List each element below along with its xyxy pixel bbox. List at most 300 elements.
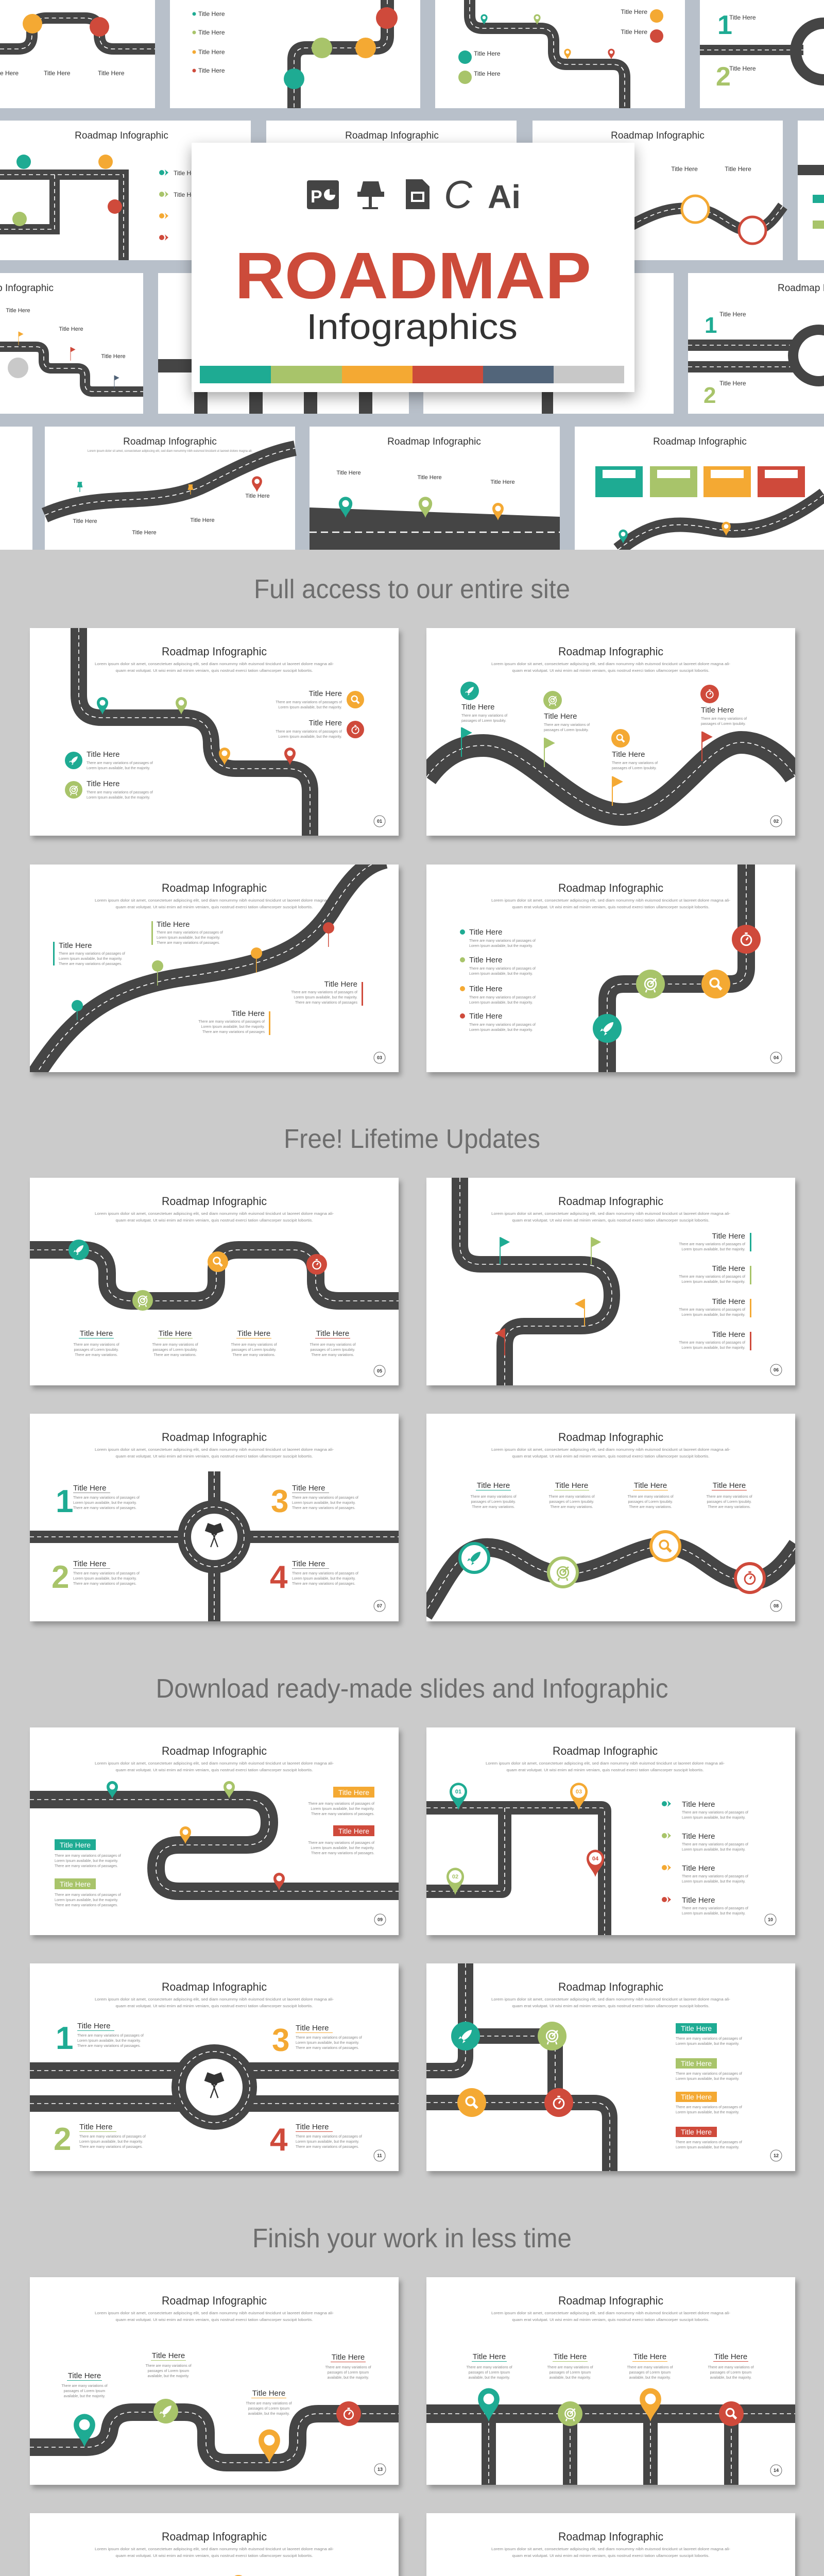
slide 14: Roadmap Infographic [558,2294,663,2307]
slide 10: Lorem Ipsum available, but the majority. [682,1912,746,1916]
slide 08: There are many variations. [472,1505,515,1509]
section title 1: Full access to our entire site [254,574,570,604]
slide 01: Roadmap Infographic [162,645,267,658]
slide 04: Lorem Ipsum available, but the majority. [469,1001,533,1005]
slide 02 [426,628,795,836]
slide 16: quam erat volutpat. Ut wisi enim ad minim veniam, quis nostrud exerci tation ullamcorper suscipit lobortis. [512,2553,710,2558]
slide 08: Title Here [634,1481,667,1490]
slide 08: There are many variations of [627,1495,674,1499]
slide 13: Lorem ipsum dolor sit amet, consectetuer adipiscing elit, sed diam nonummy nibh euismod tincidunt ut laoreet dolore magna ali- [95,2311,334,2315]
slide 02: Title Here [544,712,577,721]
slide 16: Lorem ipsum dolor sit amet, consectetuer adipiscing elit, sed diam nonummy nibh euismod tincidunt ut laoreet dolore magna ali- [491,2547,731,2551]
slide 01: Lorem Ipsum available, but the majority. [87,796,150,800]
collage row D: Title Here [132,530,157,536]
slide 12: Lorem Ipsum available, but the majority. [676,2042,740,2046]
slide 09: Title Here [338,1827,369,1835]
slide 04: There are many variations of passages of [469,996,536,999]
collage row A: e Here [0,70,19,77]
slide 12: Lorem Ipsum available, but the majority. [676,2077,740,2081]
slide 05: There are many variations. [75,1353,118,1357]
slide 07: Title Here [73,1560,106,1568]
slide 15: Roadmap Infographic [162,2530,267,2543]
slide 14: available, but the majority. [710,2376,751,2380]
slide 03: There are many variations of passages [295,1001,357,1005]
slide 11: Lorem ipsum dolor sit amet, consectetuer adipiscing elit, sed diam nonummy nibh euismod tincidunt ut laoreet dolore magna ali- [95,1997,334,2002]
slide 13: There are many variations of [61,2384,108,2388]
slide 05: passages of Lorem Ipsubity. [310,1348,355,1352]
slide 05: quam erat volutpat. Ut wisi enim ad minim veniam, quis nostrud exerci tation ullamcorper suscipit lobortis. [115,1218,313,1223]
slide 02: 02 [774,819,779,824]
collage row B: Title He [174,170,195,177]
slide 08: 08 [774,1603,779,1608]
slide 02: Title Here [612,750,645,759]
slide 06: Lorem Ipsum available, but the majority. [681,1346,745,1350]
slide 10: Lorem ipsum dolor sit amet, consectetuer adipiscing elit, sed diam nonummy nibh euismod tincidunt ut laoreet dolore magna ali- [486,1761,725,1766]
slide 12: Lorem Ipsum available, but the majority. [676,2146,740,2149]
slide 13: passages of Lorem Ipsum [148,2369,189,2373]
center title card [192,143,634,392]
slide 11: There are many variations of passages. [79,2145,143,2149]
slide 11: 1 [56,2021,73,2056]
slide 04: Title Here [469,1012,502,1021]
slide 12: There are many variations of passages of [676,2037,742,2041]
slide 02: Roadmap Infographic [558,645,663,658]
collage row C: Title Here [719,311,746,318]
icon: illustrator: Ai [488,178,521,215]
slide 14: available, but the majority. [469,2376,510,2380]
slide 04: quam erat volutpat. Ut wisi enim ad minim veniam, quis nostrud exerci tation ullamcorper suscipit lobortis. [512,905,710,909]
slide 09: quam erat volutpat. Ut wisi enim ad minim veniam, quis nostrud exerci tation ullamcorper suscipit lobortis. [115,1768,313,1772]
slide 04 [426,865,795,1072]
collage row A: 2 [716,62,731,92]
slide 10: Title Here [682,1832,715,1841]
slide 05: 05 [377,1368,382,1374]
slide 09: Lorem Ipsum available, but the majority. [311,1807,374,1811]
collage row D [0,427,824,550]
slide 11: Title Here [79,2123,112,2131]
slide 09: There are many variations of passages of [55,1854,121,1858]
slide 06: Title Here [712,1330,745,1339]
slide 12: Title Here [681,2093,712,2101]
collage row D: Roadmap Infographic [387,436,481,447]
slide 09: Title Here [60,1841,91,1849]
slide 13: There are many variations of [145,2364,192,2368]
slide 09: Title Here [338,1788,369,1797]
slide 03: Lorem Ipsum available, but the majority. [201,1025,265,1029]
slide 14: passages of Lorem Ipsum [469,2371,510,2375]
slide 11: 4 [270,2122,288,2158]
slide 11: quam erat volutpat. Ut wisi enim ad minim veniam, quis nostrud exerci tation ullamcorper suscipit lobortis. [115,2004,313,2008]
collage row C: Title Here [101,353,126,360]
slide 02: quam erat volutpat. Ut wisi enim ad minim veniam, quis nostrud exerci tation ullamcorper suscipit lobortis. [512,668,710,673]
slide 10: 03 [576,1789,582,1795]
slide 11: 2 [54,2122,71,2157]
slide 11: Title Here [77,2022,110,2030]
slide 03: Lorem Ipsum available, but the majority. [294,996,357,999]
slide 01: There are many variations of passages of [276,701,342,704]
slide 13: passages of Lorem Ipsum [64,2389,105,2393]
slide 05: passages of Lorem Ipsubity. [74,1348,119,1352]
slide 13: Title Here [252,2389,285,2398]
slide 09: Title Here [60,1880,91,1888]
slide 14: Title Here [554,2352,587,2361]
subtitle: Infographics: Infographics [306,307,518,347]
slide 08: There are many variations. [550,1505,593,1509]
slide 11: Lorem Ipsum available, but the majority. [296,2041,359,2045]
slide 05: There are many variations of [231,1343,277,1347]
slide 10: 10 [768,1917,773,1922]
slide 11: There are many variations of passages. [77,2044,141,2048]
slide 01: Lorem Ipsum available, but the majority. [278,735,342,739]
collage row B: Title Here [671,165,698,173]
slide 07: Lorem ipsum dolor sit amet, consectetuer adipiscing elit, sed diam nonummy nibh euismod tincidunt ut laoreet dolore magna ali- [95,1447,334,1452]
slide 06: Title Here [712,1297,745,1306]
slide 03: There are many variations of passages. [59,962,122,966]
slide 06: Lorem Ipsum available, but the majority. [681,1248,745,1251]
slide 03: 03 [377,1055,382,1060]
slide 03: There are many variations of passages of [59,952,125,956]
collage row D: Lorem ipsum dolor sit amet, consectetuer adipiscing elit, sed diam nonummy nibh euismod tincidunt ut laoreet dolore magna ali- [88,450,252,453]
slide 08: There are many variations of [470,1495,517,1499]
slide 06: 06 [774,1367,779,1372]
slide 01: There are many variations of passages of [87,791,153,794]
collage row D: Title Here [417,474,442,481]
slide 07 [30,1414,399,1621]
slide 02: passages of Lorem Ipsubity. [544,728,589,732]
slide 03: Lorem ipsum dolor sit amet, consectetuer adipiscing elit, sed diam nonummy nibh euismod tincidunt ut laoreet dolore magna ali- [95,898,334,903]
slide 14: There are many variations of [627,2366,673,2369]
collage row D: Title Here [336,470,361,476]
slide 14: available, but the majority. [629,2376,671,2380]
slide 10: Title Here [682,1896,715,1905]
collage row C: 2 [703,383,716,408]
slide 09: There are many variations of passages. [55,1904,118,1907]
slide 13: Title Here [68,2371,101,2380]
slide 12: 12 [774,2153,779,2158]
slide 03: There are many variations of passages [202,1030,265,1034]
slide 09: There are many variations of passages of [55,1893,121,1897]
slide 09: There are many variations of passages. [311,1812,374,1816]
slide 12: There are many variations of passages of [676,2106,742,2109]
slide 03: Title Here [324,980,357,989]
slide 07: Lorem Ipsum available, but the majority. [73,1501,137,1505]
slide 05: There are many variations. [153,1353,197,1357]
slide 01: There are many variations of passages of [276,730,342,734]
collage row D: Title Here [73,518,97,524]
slide 08: Title Here [477,1481,510,1490]
slide 04: There are many variations of passages of [469,939,536,943]
slide 02: There are many variations of [461,714,507,718]
slide 12: quam erat volutpat. Ut wisi enim ad minim veniam, quis nostrud exerci tation ullamcorper suscipit lobortis. [512,2004,710,2008]
collage row A: Title Here [729,65,756,72]
slide 13: available, but the majority. [148,2375,189,2378]
slide 07: 2 [52,1560,69,1595]
slide 15: Lorem ipsum dolor sit amet, consectetuer adipiscing elit, sed diam nonummy nibh euismod tincidunt ut laoreet dolore magna ali- [95,2547,334,2551]
slide 05: passages of Lorem Ipsubity. [152,1348,198,1352]
slide 08: Roadmap Infographic [558,1431,663,1444]
collage row D: Title Here [190,517,215,523]
slide 12: Title Here [681,2024,712,2032]
collage row C [0,273,824,414]
slide 14: Title Here [714,2352,747,2361]
slide 14: There are many variations of [708,2366,754,2369]
slide 11: 3 [272,2023,289,2058]
slide 11: Title Here [296,2024,329,2032]
slide 07: Title Here [292,1560,325,1568]
slide 07: Lorem Ipsum available, but the majority. [292,1501,356,1505]
slide 02: There are many variations of [701,717,747,721]
collage row A: Title Here [474,50,501,57]
slide 03: Lorem Ipsum available, but the majority. [157,936,220,940]
slide 01: Lorem Ipsum available, but the majority. [278,706,342,709]
collage row A: Title Here [198,10,225,18]
slide 03: Title Here [59,941,92,950]
slide 03: Title Here [232,1009,265,1018]
slide 09 [30,1727,399,1935]
slide 07: There are many variations of passages. [73,1582,136,1586]
slide 10: There are many variations of passages of [682,1843,748,1846]
slide 03: There are many variations of passages of [291,991,357,994]
slide 12: Lorem ipsum dolor sit amet, consectetuer adipiscing elit, sed diam nonummy nibh euismod tincidunt ut laoreet dolore magna ali- [491,1997,731,2002]
slide 09: Roadmap Infographic [162,1744,267,1757]
slide 05: There are many variations of [73,1343,119,1347]
collage row A [0,0,824,108]
collage row B: Title Here [725,165,751,173]
slide 14: passages of Lorem Ipsum [710,2371,751,2375]
collage row C: Title Here [6,308,30,314]
slide 05: There are many variations. [232,1353,276,1357]
slide 02: Title Here [461,703,494,711]
slide 04: Lorem Ipsum available, but the majority. [469,1028,533,1032]
slide 08: Title Here [555,1481,588,1490]
slide 03: There are many variations of passages. [157,941,220,945]
slide 10: 04 [592,1856,599,1862]
slide 08: There are many variations. [629,1505,672,1509]
collage row A: Title Here [621,8,647,15]
collage row C: Title Here [59,326,83,332]
slide 03: Roadmap Infographic [162,882,267,894]
icon: keynote [357,181,384,209]
slide 06: Title Here [712,1264,745,1273]
icon: canva: C [444,173,473,217]
slide 01: quam erat volutpat. Ut wisi enim ad minim veniam, quis nostrud exerci tation ullamcorper suscipit lobortis. [115,668,313,673]
slide 07: 3 [271,1484,288,1519]
collage row A: Title Here [729,14,756,21]
slide 07: There are many variations of passages of [73,1496,140,1500]
slide 07: There are many variations of passages of [292,1572,358,1575]
collage row D: Roadmap Infographic [123,436,217,447]
header collage [0,0,824,550]
collage row B: Roadmap Infographic [611,130,705,141]
slide 03: There are many variations of passages of [198,1020,265,1024]
slide 05: Title Here [316,1329,349,1338]
slide 02: passages of Lorem Ipsubity. [612,767,657,770]
slide 07: There are many variations of passages. [73,1506,136,1510]
slide 11: Lorem Ipsum available, but the majority. [79,2140,143,2144]
slide 06: There are many variations of passages of [679,1275,745,1279]
slide 14: 14 [774,2468,779,2473]
slide 11: There are many variations of passages of [77,2034,144,2038]
slide 01: Title Here [309,689,342,698]
slide 11: Lorem Ipsum available, but the majority. [77,2039,141,2043]
slide 09: There are many variations of passages. [55,1865,118,1868]
slide 10: Title Here [682,1864,715,1873]
slide 03: There are many variations of passages of [157,931,223,935]
slide 02: There are many variations of [544,723,590,727]
slide 06: Lorem Ipsum available, but the majority. [681,1313,745,1317]
slide 10: Lorem Ipsum available, but the majority. [682,1880,746,1884]
slide 11: There are many variations of passages of [296,2135,362,2139]
slide 05: Lorem ipsum dolor sit amet, consectetuer adipiscing elit, sed diam nonummy nibh euismod tincidunt ut laoreet dolore magna ali- [95,1211,334,1216]
slide 14: There are many variations of [466,2366,512,2369]
slide 10: 01 [455,1789,461,1795]
slide 05: Title Here [237,1329,270,1338]
slide 11: There are many variations of passages. [296,2145,359,2149]
slide 12: Lorem Ipsum available, but the majority. [676,2111,740,2114]
slide 04: 04 [774,1055,779,1060]
slide 09: Lorem Ipsum available, but the majority. [311,1846,374,1850]
collage row B: Roadmap Infographic [345,130,439,141]
slide 07: There are many variations of passages of [73,1572,140,1575]
slide 14: Title Here [633,2352,666,2361]
slide 08: passages of Lorem Ipsubity. [707,1500,752,1504]
slide 11: There are many variations of passages of [296,2036,362,2040]
collage row C: 1 [705,313,717,338]
slide 08: Title Here [713,1481,746,1490]
slide 13: available, but the majority. [328,2376,369,2380]
slide 12: Title Here [681,2128,712,2136]
slide 09: Lorem ipsum dolor sit amet, consectetuer adipiscing elit, sed diam nonummy nibh euismod tincidunt ut laoreet dolore magna ali- [95,1761,334,1766]
slide 04: Lorem Ipsum available, but the majority. [469,944,533,948]
slide 13: There are many variations of [325,2366,371,2369]
slide 11: Lorem Ipsum available, but the majority. [296,2140,359,2144]
slide 10: 02 [452,1874,458,1880]
slide 04: Title Here [469,928,502,937]
slide 07: There are many variations of passages. [292,1506,355,1510]
collage row A: Title Here [621,28,647,36]
slide 13: quam erat volutpat. Ut wisi enim ad minim veniam, quis nostrud exerci tation ullamcorper suscipit lobortis. [115,2317,313,2322]
slide 01: There are many variations of passages of [87,761,153,765]
slide 14: quam erat volutpat. Ut wisi enim ad minim veniam, quis nostrud exerci tation ullamcorper suscipit lobortis. [512,2317,710,2322]
slide 11: Roadmap Infographic [162,1980,267,1993]
slide 03: Title Here [157,920,190,929]
slide 13: available, but the majority. [248,2412,289,2416]
slide 02: passages of Lorem Ipsubity. [461,719,506,723]
slide 13: Title Here [152,2351,185,2360]
color bar [200,366,624,383]
title: ROADMAP: ROADMAP [235,239,591,313]
slide 10: There are many variations of passages of [682,1811,748,1815]
slide 10 [426,1727,795,1935]
slide 05: Roadmap Infographic [162,1195,267,1208]
section title 4: Finish your work in less time [252,2224,572,2253]
slide 11: There are many variations of passages of [79,2135,146,2139]
collage row C: Title Here [719,380,746,387]
collage row B: Title He [174,191,195,198]
slide 12 [426,1963,795,2171]
slide 15 [30,2513,399,2576]
slide 09: There are many variations of passages of [308,1841,374,1845]
slide 03: quam erat volutpat. Ut wisi enim ad minim veniam, quis nostrud exerci tation ullamcorper suscipit lobortis. [115,905,313,909]
slide 01: Title Here [309,719,342,727]
slide 06: There are many variations of passages of [679,1308,745,1312]
slide 13: Title Here [332,2353,365,2362]
slide 05: There are many variations of [152,1343,198,1347]
slide 05: passages of Lorem Ipsubity. [231,1348,277,1352]
slide 13: passages of Lorem Ipsum [328,2371,369,2375]
slide 11: There are many variations of passages. [296,2046,359,2050]
slide 16 [426,2513,795,2576]
slide 10: Lorem Ipsum available, but the majority. [682,1848,746,1852]
collage row A: Title Here [198,48,225,56]
slide 04: There are many variations of passages of [469,967,536,971]
slide 15: quam erat volutpat. Ut wisi enim ad minim veniam, quis nostrud exerci tation ullamcorper suscipit lobortis. [115,2553,313,2558]
slide 16: Roadmap Infographic [558,2530,663,2543]
collage row A: Title Here [44,70,71,77]
slide 06: Roadmap Infographic [558,1195,663,1208]
slide 13: available, but the majority. [64,2395,105,2398]
slide 07: There are many variations of passages. [292,1582,355,1586]
slide 04: Lorem Ipsum available, but the majority. [469,972,533,976]
slide 02: Lorem ipsum dolor sit amet, consectetuer adipiscing elit, sed diam nonummy nibh euismod tincidunt ut laoreet dolore magna ali- [491,662,731,666]
slide 11: 11 [377,2153,382,2158]
slide 14: There are many variations of [547,2366,593,2369]
slide 04: Lorem ipsum dolor sit amet, consectetuer adipiscing elit, sed diam nonummy nibh euismod tincidunt ut laoreet dolore magna ali- [491,898,731,903]
slide 05: There are many variations. [311,1353,354,1357]
slide 01: Lorem Ipsum available, but the majority. [87,767,150,770]
slide 05: There are many variations of [310,1343,356,1347]
slide 06: Title Here [712,1232,745,1241]
slide 13 [30,2277,399,2485]
slide 08: There are many variations of [706,1495,752,1499]
collage row A: Title Here [198,29,225,36]
slide 04: Roadmap Infographic [558,882,663,894]
slide 01 [30,628,399,836]
slide 06: There are many variations of passages of [679,1341,745,1345]
slide 09: There are many variations of passages. [311,1852,374,1855]
slide 07: Lorem Ipsum available, but the majority. [292,1577,356,1581]
slide 03: Lorem Ipsum available, but the majority. [59,957,123,961]
slide 06: Lorem ipsum dolor sit amet, consectetuer adipiscing elit, sed diam nonummy nibh euismod tincidunt ut laoreet dolore magna ali- [491,1211,731,1216]
slide 06 [426,1178,795,1385]
collage row D: Title Here [245,493,270,499]
slide 07: Title Here [73,1484,106,1493]
slide 08: Lorem ipsum dolor sit amet, consectetuer adipiscing elit, sed diam nonummy nibh euismod tincidunt ut laoreet dolore magna ali- [491,1447,731,1452]
collage row D: Title Here [490,479,515,485]
slide 11 [30,1963,399,2171]
collage row B: Roadmap Infographic [75,130,168,141]
slide 11: Title Here [296,2123,329,2131]
slide 10: There are many variations of passages of [682,1875,748,1878]
slide 07: Roadmap Infographic [162,1431,267,1444]
slide 14 [426,2277,795,2485]
slide 14: available, but the majority. [550,2376,591,2380]
slide 10: There are many variations of passages of [682,1907,748,1910]
slide 02: There are many variations of [612,761,658,765]
collage row A: Title Here [474,70,501,77]
slide 04: There are many variations of passages of [469,1023,536,1027]
slide 03 [30,865,399,1072]
slide 12: Title Here [681,2059,712,2067]
slide 05: Title Here [80,1329,113,1338]
slide 12: Roadmap Infographic [558,1980,663,1993]
icon: powerpoint [307,180,339,209]
slide 09: Lorem Ipsum available, but the majority. [55,1859,118,1863]
slide 12: There are many variations of passages of [676,2072,742,2076]
slide 04: Title Here [469,956,502,964]
slide 14: passages of Lorem Ipsum [629,2371,671,2375]
slide 07: 07 [377,1603,382,1608]
